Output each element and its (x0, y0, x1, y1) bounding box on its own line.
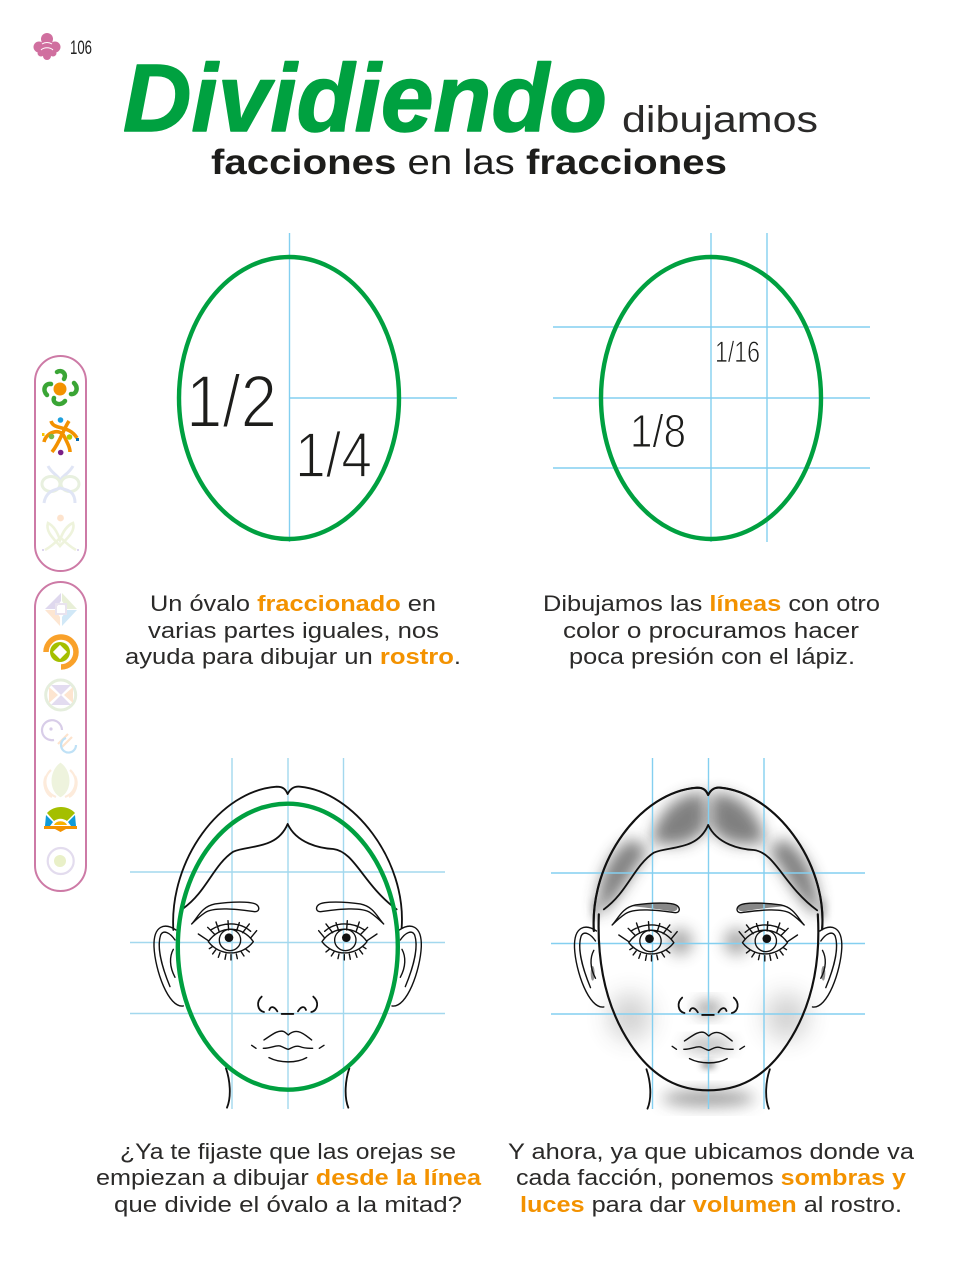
caption: panel 2: Dibujamos las líneas con otro (543, 591, 880, 616)
label: 1/2: 1/2 (186, 360, 277, 443)
caption: panel 3: que divide el óvalo a la mitad? (114, 1192, 462, 1217)
icon: flower (34, 33, 60, 60)
green oval (601, 257, 821, 539)
face drawing (154, 787, 421, 1108)
green oval (178, 804, 398, 1090)
grid lines (553, 233, 870, 542)
caption: panel 2 (543, 591, 880, 669)
caption: panel 1: ayuda para dibujar un rostro . (125, 644, 461, 669)
icon: orange ring with green diamond (46, 637, 76, 667)
panel: line drawing with green oval (130, 758, 445, 1109)
caption: panel 4: cada facción, ponemos sombras y (516, 1165, 907, 1190)
icon: faded diamond (45, 593, 77, 626)
icon: fan (44, 807, 77, 832)
caption: panel 2: poca presión con el lápiz. (569, 644, 855, 669)
face drawing (574, 788, 842, 1109)
icon: faded lotus (44, 764, 77, 797)
icon: orange circle with leaves (44, 371, 77, 404)
label: 1/16: 1/16 (715, 336, 760, 369)
page number badge (34, 33, 92, 60)
shading (591, 793, 827, 1106)
icon: orange figure (42, 417, 79, 455)
caption: panel 1 (125, 591, 461, 669)
green oval (179, 257, 399, 539)
caption: panel 3 (96, 1139, 482, 1217)
grid lines (130, 758, 445, 1109)
icon: faded square cross (46, 680, 76, 710)
label: 1/4: 1/4 (295, 419, 372, 491)
sidebar: lower capsule (35, 582, 86, 891)
sidebar: upper capsule (35, 356, 86, 571)
caption: panel 2: color o procuramos hacer (563, 618, 859, 643)
head outline (594, 788, 822, 1090)
panel: eighths and sixteenths (553, 233, 870, 542)
panel: halves and quarters (179, 233, 457, 542)
page number: 106 (70, 38, 92, 59)
icon: faded plant (42, 515, 79, 551)
caption: panel 4: Y ahora, ya que ubicamos donde va (508, 1139, 915, 1164)
caption: panel 4 (508, 1139, 915, 1217)
grid lines (551, 758, 865, 1109)
icon: faded rings (42, 720, 76, 753)
label: 1/8: 1/8 (630, 405, 686, 457)
grid lines (289, 233, 457, 542)
heading: Dividiendo: Dividiendo (123, 45, 607, 152)
icon: faded arcs (42, 466, 79, 503)
caption: panel 3: ¿Ya te fijaste que las orejas se (120, 1139, 456, 1164)
icon: faded circle (48, 848, 74, 874)
caption: panel 4: luces para dar volumen al rostro. (520, 1192, 902, 1217)
panel: shaded face (551, 758, 865, 1109)
heading: dibujamos: dibujamos (622, 99, 818, 140)
heading: second line: facciones en las fracciones (211, 143, 727, 182)
caption: panel 1: varias partes iguales, nos (148, 618, 439, 643)
caption: panel 3: empiezan a dibujar desde la línea (96, 1165, 482, 1190)
caption: panel 1: Un óvalo fraccionado en (150, 591, 436, 616)
title (123, 45, 818, 182)
